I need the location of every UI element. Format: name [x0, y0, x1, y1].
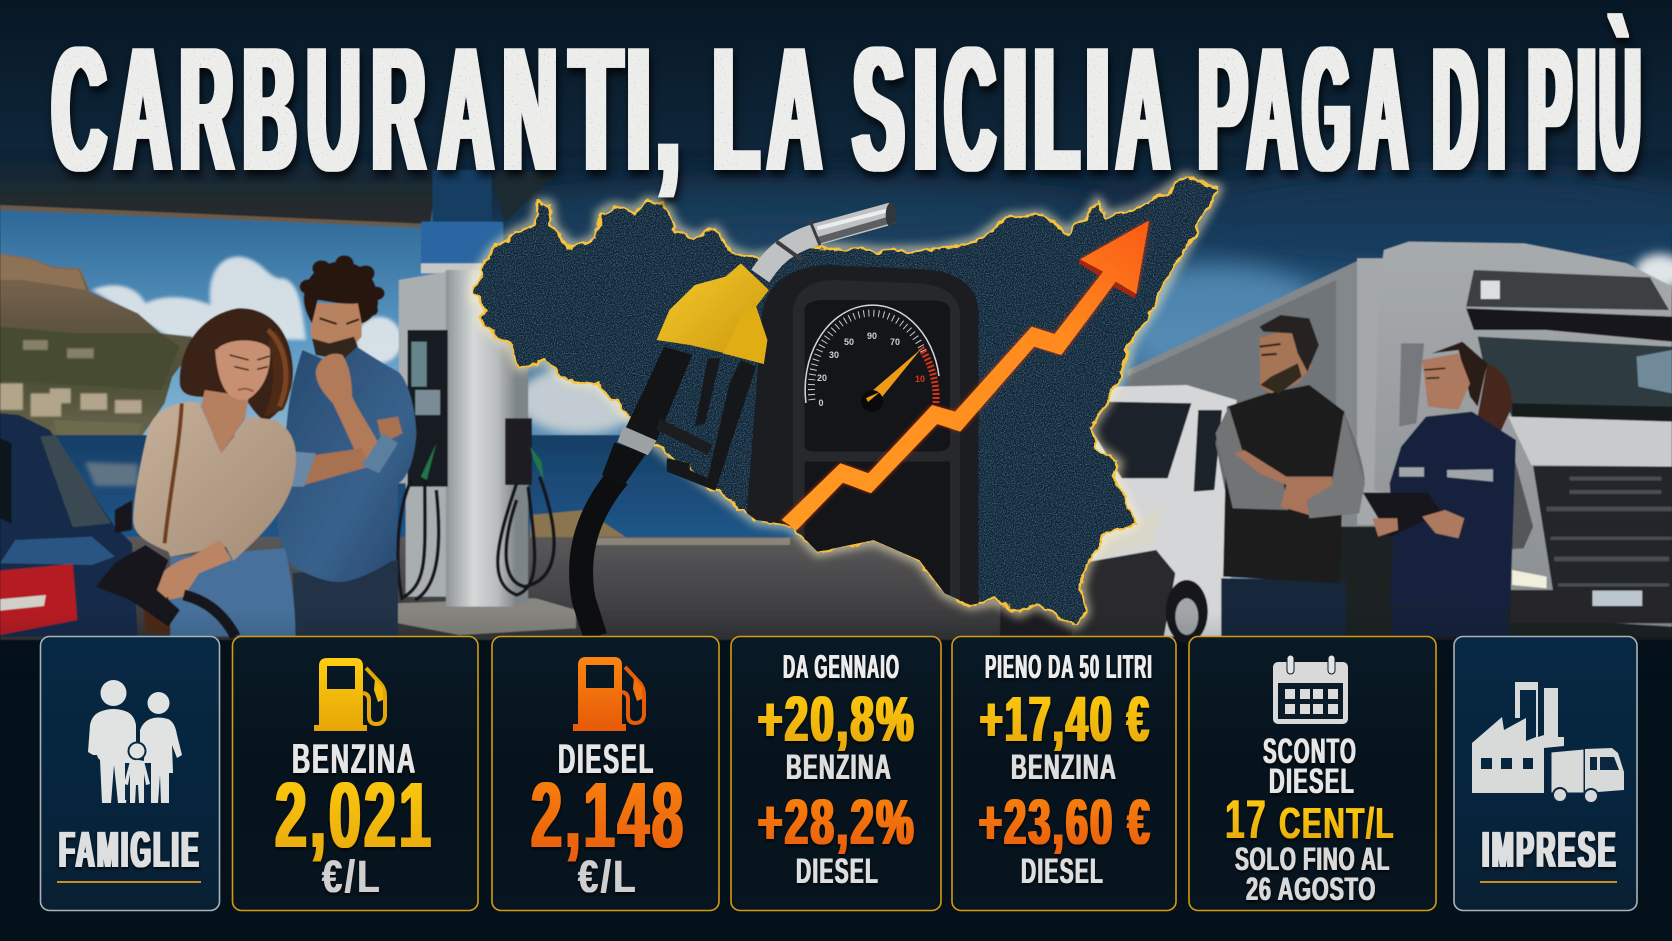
gauge: 10 — [915, 374, 925, 384]
title: A — [115, 10, 171, 208]
gauge: 20 — [817, 373, 827, 383]
workers: man and woman — [1216, 315, 1533, 637]
road — [0, 537, 1000, 640]
label: famiglie: FAMIGLIE — [59, 821, 201, 878]
label: diesel: DIESEL — [1021, 852, 1104, 891]
label: diesel: DIESEL — [558, 735, 655, 782]
ferrule — [617, 427, 657, 455]
woman — [133, 308, 296, 637]
central column — [446, 270, 515, 607]
note: validity: 26 AGOSTO — [1246, 871, 1376, 907]
value: benzina price: 2,021 — [275, 763, 434, 867]
sleeve — [602, 443, 646, 486]
sky — [0, 150, 1672, 640]
value: benzina percent: +20,8% — [758, 683, 916, 755]
pump display — [408, 330, 448, 487]
fuel nozzle in car — [96, 545, 235, 637]
panel: diesel price — [492, 636, 719, 910]
panel: benzina price — [232, 636, 478, 910]
title: I — [626, 10, 651, 208]
gauge — [805, 305, 939, 412]
title: T — [570, 10, 622, 208]
title: I — [1085, 10, 1110, 208]
panel: imprese — [1454, 636, 1637, 910]
blue pillar — [432, 170, 492, 227]
title: A — [1360, 10, 1407, 208]
pump base — [398, 598, 576, 635]
value: 17 cent/l: 17 — [1225, 788, 1267, 850]
hoses — [398, 477, 554, 600]
rising arrow — [782, 221, 1149, 530]
title: N — [503, 10, 557, 208]
icon: yellow fuel pump — [314, 658, 385, 731]
fuel pump station — [398, 170, 576, 635]
title: A — [768, 10, 821, 208]
clouds — [92, 257, 402, 363]
heading: sconto diesel — [1263, 732, 1357, 801]
title: A — [1117, 10, 1169, 208]
title: P — [1198, 10, 1247, 208]
sky: left brighter — [0, 205, 460, 440]
car — [0, 413, 138, 637]
title: L — [1034, 10, 1079, 208]
unit: diesel: €/L — [578, 851, 638, 902]
gauge needle — [865, 349, 921, 402]
number plate — [1592, 591, 1642, 606]
title: S — [853, 10, 904, 208]
label: benzina: BENZINA — [292, 735, 417, 782]
gauge: 90 — [867, 331, 877, 341]
van wheel — [1166, 580, 1208, 643]
panel: sconto diesel — [1189, 636, 1436, 910]
title — [52, 10, 1640, 208]
panel: famiglie — [40, 636, 220, 910]
sea — [0, 435, 800, 540]
gauge: 0 — [818, 398, 824, 408]
tail light — [0, 564, 77, 635]
icon: calendar — [1273, 655, 1348, 724]
map: Sicily island with glowing coast — [473, 177, 1218, 637]
fuel nozzle and hose — [581, 203, 896, 637]
icon: orange fuel pump — [573, 657, 644, 731]
panel: pieno da 50 litri — [952, 636, 1176, 910]
scene: photographic backdrop — [0, 150, 1672, 643]
value: 17 cent/l — [1225, 788, 1395, 850]
value: diesel euro: +23,60 € — [979, 786, 1152, 858]
truck cab — [1374, 242, 1672, 627]
title: D — [1433, 10, 1477, 208]
title: A — [439, 10, 493, 208]
label: diesel: DIESEL — [796, 852, 879, 891]
gas station canopy — [0, 150, 440, 227]
gauge: 50 — [844, 337, 854, 347]
title: I — [1488, 10, 1505, 208]
ground right — [1000, 580, 1672, 640]
icon: family — [88, 680, 182, 803]
gauge: 70 — [890, 337, 900, 347]
value: diesel price: 2,148 — [531, 763, 686, 867]
handle — [626, 347, 692, 441]
title: P — [1528, 10, 1571, 208]
shoreline rocks — [530, 510, 630, 540]
unit: benzina: €/L — [322, 851, 382, 902]
note: validity: SOLO FINO AL — [1235, 841, 1390, 877]
trigger guard — [667, 360, 756, 491]
title: G — [1303, 10, 1350, 208]
title: C — [945, 10, 995, 208]
heading: da gennaio: DA GENNAIO — [783, 648, 900, 685]
female worker — [1363, 342, 1533, 637]
chassis shadow — [1302, 490, 1672, 637]
title: L — [713, 10, 759, 208]
title: I — [1577, 10, 1596, 208]
title: I — [913, 10, 938, 208]
gauge: 30 — [829, 350, 839, 360]
coast glow — [473, 177, 1218, 625]
hose — [581, 477, 618, 637]
title: U — [307, 10, 360, 208]
value: diesel percent: +28,2% — [758, 786, 916, 858]
fuel pump with gauge — [746, 265, 979, 612]
white van — [1072, 385, 1237, 643]
title: C — [52, 10, 106, 208]
clipboard — [1363, 493, 1441, 537]
mountain and village — [0, 253, 195, 437]
spout — [760, 213, 892, 276]
note: validity — [1235, 841, 1390, 907]
sky: right side clouds — [510, 170, 1672, 375]
background: dark textured header band — [0, 0, 1672, 230]
heading: sconto diesel: SCONTO — [1263, 732, 1357, 771]
label: benzina: BENZINA — [786, 748, 892, 787]
title: , — [656, 10, 680, 208]
title: R — [372, 10, 425, 208]
island shape — [473, 177, 1218, 625]
male worker — [1216, 315, 1365, 637]
yellow nozzle body — [657, 263, 769, 364]
heading: sconto diesel: DIESEL — [1269, 762, 1355, 801]
white front panel — [1508, 417, 1672, 467]
man — [277, 255, 416, 637]
left pump housing — [399, 272, 448, 597]
title: B — [243, 10, 296, 208]
label: benzina: BENZINA — [1011, 748, 1117, 787]
title: I — [1002, 10, 1028, 208]
title: R — [180, 10, 233, 208]
trailer truck — [1127, 242, 1672, 637]
value: 17 cent/l: CENT/L — [1279, 799, 1395, 848]
windshield — [1478, 337, 1672, 422]
icon: factory and truck — [1472, 682, 1624, 803]
panel: da gennaio — [731, 636, 941, 910]
grille — [1533, 466, 1672, 600]
heading: pieno: PIENO DA 50 LITRI — [985, 648, 1153, 685]
couple: woman and man — [96, 255, 416, 637]
headlight — [1512, 570, 1547, 588]
back panel — [501, 350, 528, 603]
dark base band — [0, 612, 1672, 941]
value: benzina euro: +17,40 € — [980, 683, 1151, 755]
horizon haze behind the island — [518, 366, 642, 434]
title: A — [1248, 10, 1296, 208]
